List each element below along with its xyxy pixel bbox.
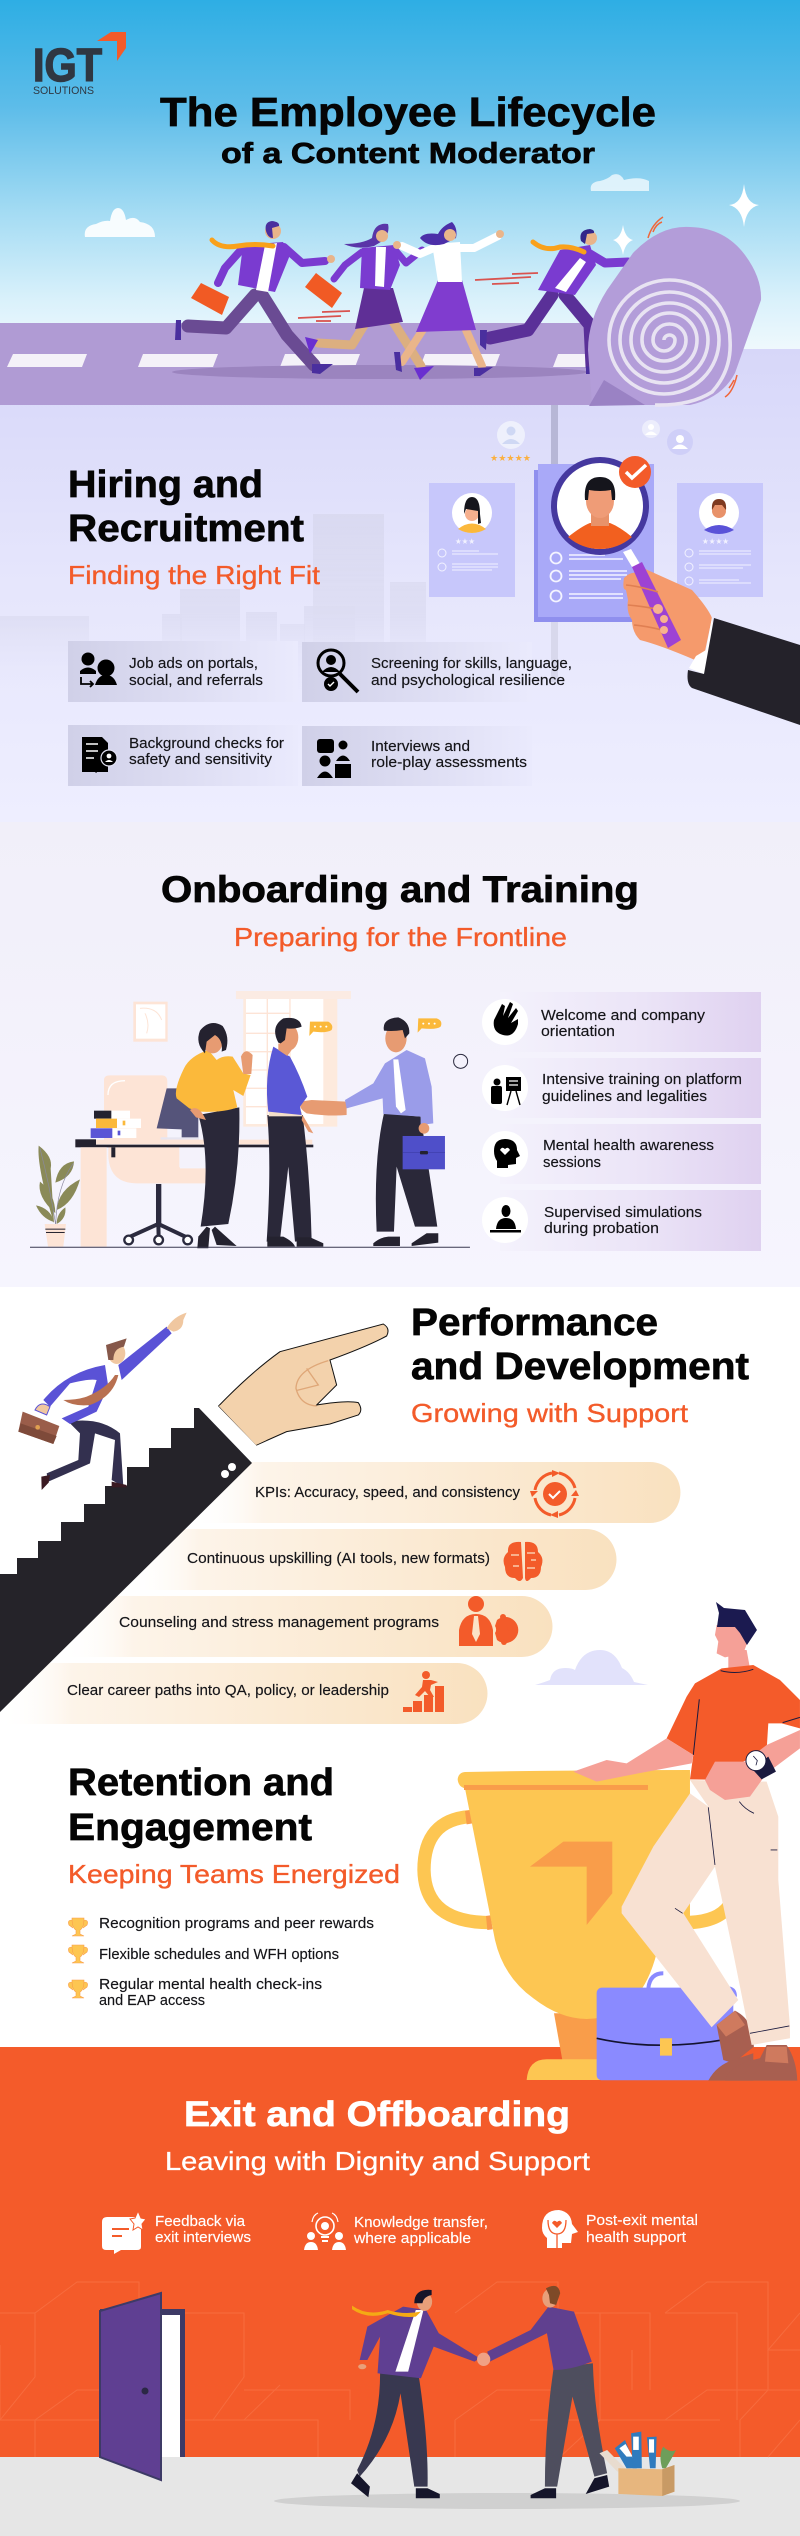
title: The Employee Lifecycle xyxy=(160,89,656,135)
arm on trophy xyxy=(573,1738,693,1782)
item: post-exit: health support xyxy=(586,2229,687,2246)
icon: person at desk xyxy=(490,1205,521,1232)
left man suit xyxy=(360,2307,480,2378)
icon: people referral xyxy=(80,652,117,687)
support pole xyxy=(551,405,558,470)
man in lilac xyxy=(376,1113,437,1232)
item: knowledge: where applicable xyxy=(353,2230,471,2247)
subheading: Preparing for the Frontline xyxy=(234,922,567,952)
runner man four xyxy=(480,229,637,374)
icon: magnifier check xyxy=(318,650,358,692)
suit sleeve xyxy=(688,618,800,725)
item: simulations: during probation xyxy=(544,1220,659,1237)
icon: person with gear xyxy=(459,1596,518,1646)
heading: hiring: Recruitment xyxy=(68,508,304,550)
floor shadow xyxy=(274,2493,740,2509)
pill 1 xyxy=(190,1462,680,1523)
woman xyxy=(197,1227,210,1248)
item: training: guidelines and legalities xyxy=(542,1088,707,1105)
card: interviews: Interviews and xyxy=(371,738,470,755)
cuff buttons xyxy=(228,1463,236,1471)
item: mental health: Mental health awareness xyxy=(543,1137,714,1154)
road xyxy=(0,323,640,405)
card: job ads: Job ads on portals, xyxy=(129,655,258,672)
carpet roll xyxy=(588,217,761,406)
left shoe xyxy=(717,2011,754,2063)
briefcase xyxy=(597,1973,735,2080)
pill 3 xyxy=(60,1596,552,1657)
window xyxy=(243,999,337,1127)
roll crease xyxy=(589,380,645,406)
monitor xyxy=(157,1088,198,1138)
logo letters: IGT xyxy=(33,39,102,91)
resume card left: ★★★ xyxy=(455,537,475,546)
icon: interview xyxy=(317,739,351,778)
icon: climbing runner xyxy=(403,1671,444,1712)
icon: waving hand xyxy=(494,1002,518,1036)
floor line xyxy=(30,1246,470,1249)
chair xyxy=(104,1075,167,1140)
card: screening xyxy=(302,642,572,702)
pill labels: Continuous upskilling (AI tools, new formats) xyxy=(187,1550,490,1567)
orange wall pattern xyxy=(0,2282,800,2457)
item: simulations xyxy=(482,1190,761,1251)
logo arrow xyxy=(97,32,126,61)
box xyxy=(618,2465,674,2496)
wall picture xyxy=(133,1002,168,1042)
runner woman three xyxy=(393,222,504,376)
item: feedback: exit interviews xyxy=(155,2229,251,2246)
floating avatars: ★★★★★ xyxy=(490,453,531,463)
card: background checks xyxy=(68,725,298,786)
pill 2 xyxy=(125,1529,616,1590)
heading: hiring: Hiring and xyxy=(68,464,263,506)
item: feedback: Feedback via xyxy=(155,2213,246,2230)
hiring section background xyxy=(0,349,800,822)
exit items xyxy=(102,2210,698,2254)
item: post-exit: Post-exit mental xyxy=(586,2212,698,2229)
man in blue xyxy=(267,1115,312,1242)
hiring items xyxy=(68,641,572,786)
floor xyxy=(0,2457,800,2536)
item: knowledge xyxy=(304,2213,488,2250)
subheading: Finding the Right Fit xyxy=(68,560,321,590)
title: of a Content Moderator xyxy=(221,138,595,170)
icon: document check xyxy=(82,737,117,772)
subheading: Leaving with Dignity and Support xyxy=(165,2146,591,2176)
cuff xyxy=(689,617,714,674)
small ring xyxy=(454,1054,468,1068)
other arm xyxy=(705,1730,800,1800)
item: post-exit xyxy=(542,2210,698,2248)
blue briefcase xyxy=(403,1136,445,1169)
skyline xyxy=(0,514,426,696)
heading: retention xyxy=(68,1762,400,1889)
logo subtitle: SOLUTIONS xyxy=(33,85,94,97)
icon: head with stethoscope xyxy=(542,2210,578,2248)
resume card centre xyxy=(534,464,654,622)
card: interviews: role-play assessments xyxy=(371,754,527,771)
card: screening: Screening for skills, language, xyxy=(371,655,572,672)
running shadow xyxy=(172,365,588,379)
item: training xyxy=(482,1058,761,1118)
floating avatars xyxy=(490,420,693,463)
speed lines xyxy=(298,273,538,321)
pill labels xyxy=(67,1484,520,1699)
trophy arrow xyxy=(530,1842,612,1925)
item: simulations: Supervised simulations xyxy=(544,1204,702,1221)
exit section background xyxy=(0,2047,800,2457)
check badge xyxy=(619,456,651,488)
resume card left xyxy=(429,483,515,597)
retention section background xyxy=(0,1287,800,2047)
item: training: Intensive training on platform xyxy=(542,1071,742,1088)
onboarding section background xyxy=(0,822,800,1287)
trophy cup xyxy=(458,1770,690,2019)
heading: hiring xyxy=(68,464,321,590)
heading: performance: Performance xyxy=(411,1302,658,1344)
heading: exit xyxy=(165,2095,591,2176)
sky background xyxy=(0,0,800,352)
heading: exit: Exit and Offboarding xyxy=(184,2095,570,2134)
left man legs xyxy=(357,2373,428,2487)
trophy stem xyxy=(554,2013,600,2060)
files xyxy=(599,2450,625,2472)
card: job ads: social, and referrals xyxy=(129,672,263,689)
item: mental health xyxy=(482,1124,761,1184)
magnifying glass and candidate xyxy=(554,456,651,552)
card: job ads xyxy=(68,641,298,702)
item: knowledge: Knowledge transfer, xyxy=(354,2214,488,2231)
icon: head with heart xyxy=(494,1139,520,1168)
box of belongings xyxy=(599,2432,676,2496)
desk xyxy=(96,1140,312,1144)
subheading: Keeping Teams Energized xyxy=(68,1859,400,1889)
card: screening: and psychological resilience xyxy=(371,672,565,689)
item: welcome: Welcome and company xyxy=(541,1007,706,1024)
road dashes xyxy=(7,354,600,367)
avatar with stars xyxy=(497,421,525,449)
motion marks xyxy=(648,217,737,397)
item: feedback xyxy=(102,2211,251,2254)
right man sweater xyxy=(487,2307,592,2370)
pointing hand xyxy=(219,1324,388,1445)
icon: lightbulb with people xyxy=(304,2213,346,2250)
onboarding items xyxy=(482,992,761,1251)
stairs sleeve xyxy=(0,1408,252,1712)
right man legs xyxy=(545,2363,607,2487)
standing man xyxy=(573,1602,800,2081)
heading: performance: and Development xyxy=(411,1346,749,1388)
pill bars xyxy=(0,1462,680,1724)
back leg xyxy=(690,1780,790,2045)
bullet 2: Flexible schedules and WFH options xyxy=(99,1946,339,1963)
cloud xyxy=(535,1650,648,1685)
resume card right xyxy=(677,483,763,597)
climbing man xyxy=(18,1313,187,1490)
item: welcome: orientation xyxy=(541,1023,615,1040)
item: mental health: sessions xyxy=(543,1154,601,1171)
right shoe xyxy=(725,2045,797,2081)
neck xyxy=(728,1650,750,1672)
heading: onboarding: Onboarding and Training xyxy=(161,869,639,910)
icon: trainer board xyxy=(491,1077,521,1105)
handshake xyxy=(477,2353,490,2366)
binders xyxy=(94,1111,130,1119)
trophy handles xyxy=(424,1817,490,1923)
runner woman two xyxy=(305,224,434,380)
pill labels: KPIs: Accuracy, speed, and consistency xyxy=(255,1484,520,1501)
clouds and sparkles xyxy=(85,174,759,255)
icon: kpi target xyxy=(530,1470,579,1518)
card: interviews xyxy=(302,726,532,786)
spiral xyxy=(609,280,730,405)
door panel xyxy=(100,2293,161,2480)
icon: brain xyxy=(504,1542,542,1581)
watch xyxy=(752,1757,776,1779)
heading: retention: Engagement xyxy=(68,1807,312,1849)
plant xyxy=(36,1146,80,1224)
pill labels: Clear career paths into QA, policy, or leadership xyxy=(67,1682,389,1699)
pill 4 xyxy=(0,1663,487,1724)
title xyxy=(160,89,656,170)
hand holding magnifier xyxy=(623,549,800,725)
front leg xyxy=(622,1793,738,2027)
hair xyxy=(716,1602,757,1645)
cloud right xyxy=(591,174,649,191)
bullet 1: Recognition programs and peer rewards xyxy=(99,1915,374,1932)
door xyxy=(100,2293,185,2480)
card: background checks: Background checks for xyxy=(129,735,284,752)
runner man one xyxy=(175,221,335,374)
subheading: Growing with Support xyxy=(411,1398,689,1428)
heading: retention: Retention and xyxy=(68,1762,334,1804)
resume card right: ★★★★ xyxy=(702,537,729,546)
big sparkle xyxy=(729,184,759,227)
small sparkle xyxy=(613,225,633,255)
bullet 3 xyxy=(68,1976,322,2009)
heading: onboarding xyxy=(161,869,639,952)
cloud left xyxy=(85,208,155,237)
item: welcome xyxy=(482,992,761,1052)
logo xyxy=(33,32,126,97)
retention bullet list xyxy=(68,1915,374,2009)
face xyxy=(715,1625,748,1657)
icon: chat star xyxy=(102,2211,146,2254)
bullet 3: and EAP access xyxy=(99,1992,205,2009)
pill labels: Counseling and stress management programs xyxy=(119,1614,439,1631)
handshake men xyxy=(351,2286,609,2498)
bullet 3: Regular mental health check-ins xyxy=(99,1976,322,1993)
office illustration xyxy=(30,991,470,1248)
heading: performance xyxy=(411,1302,749,1428)
card: background checks: safety and sensitivity xyxy=(129,751,273,768)
shirt xyxy=(667,1665,800,1780)
trophy xyxy=(424,1770,728,2080)
